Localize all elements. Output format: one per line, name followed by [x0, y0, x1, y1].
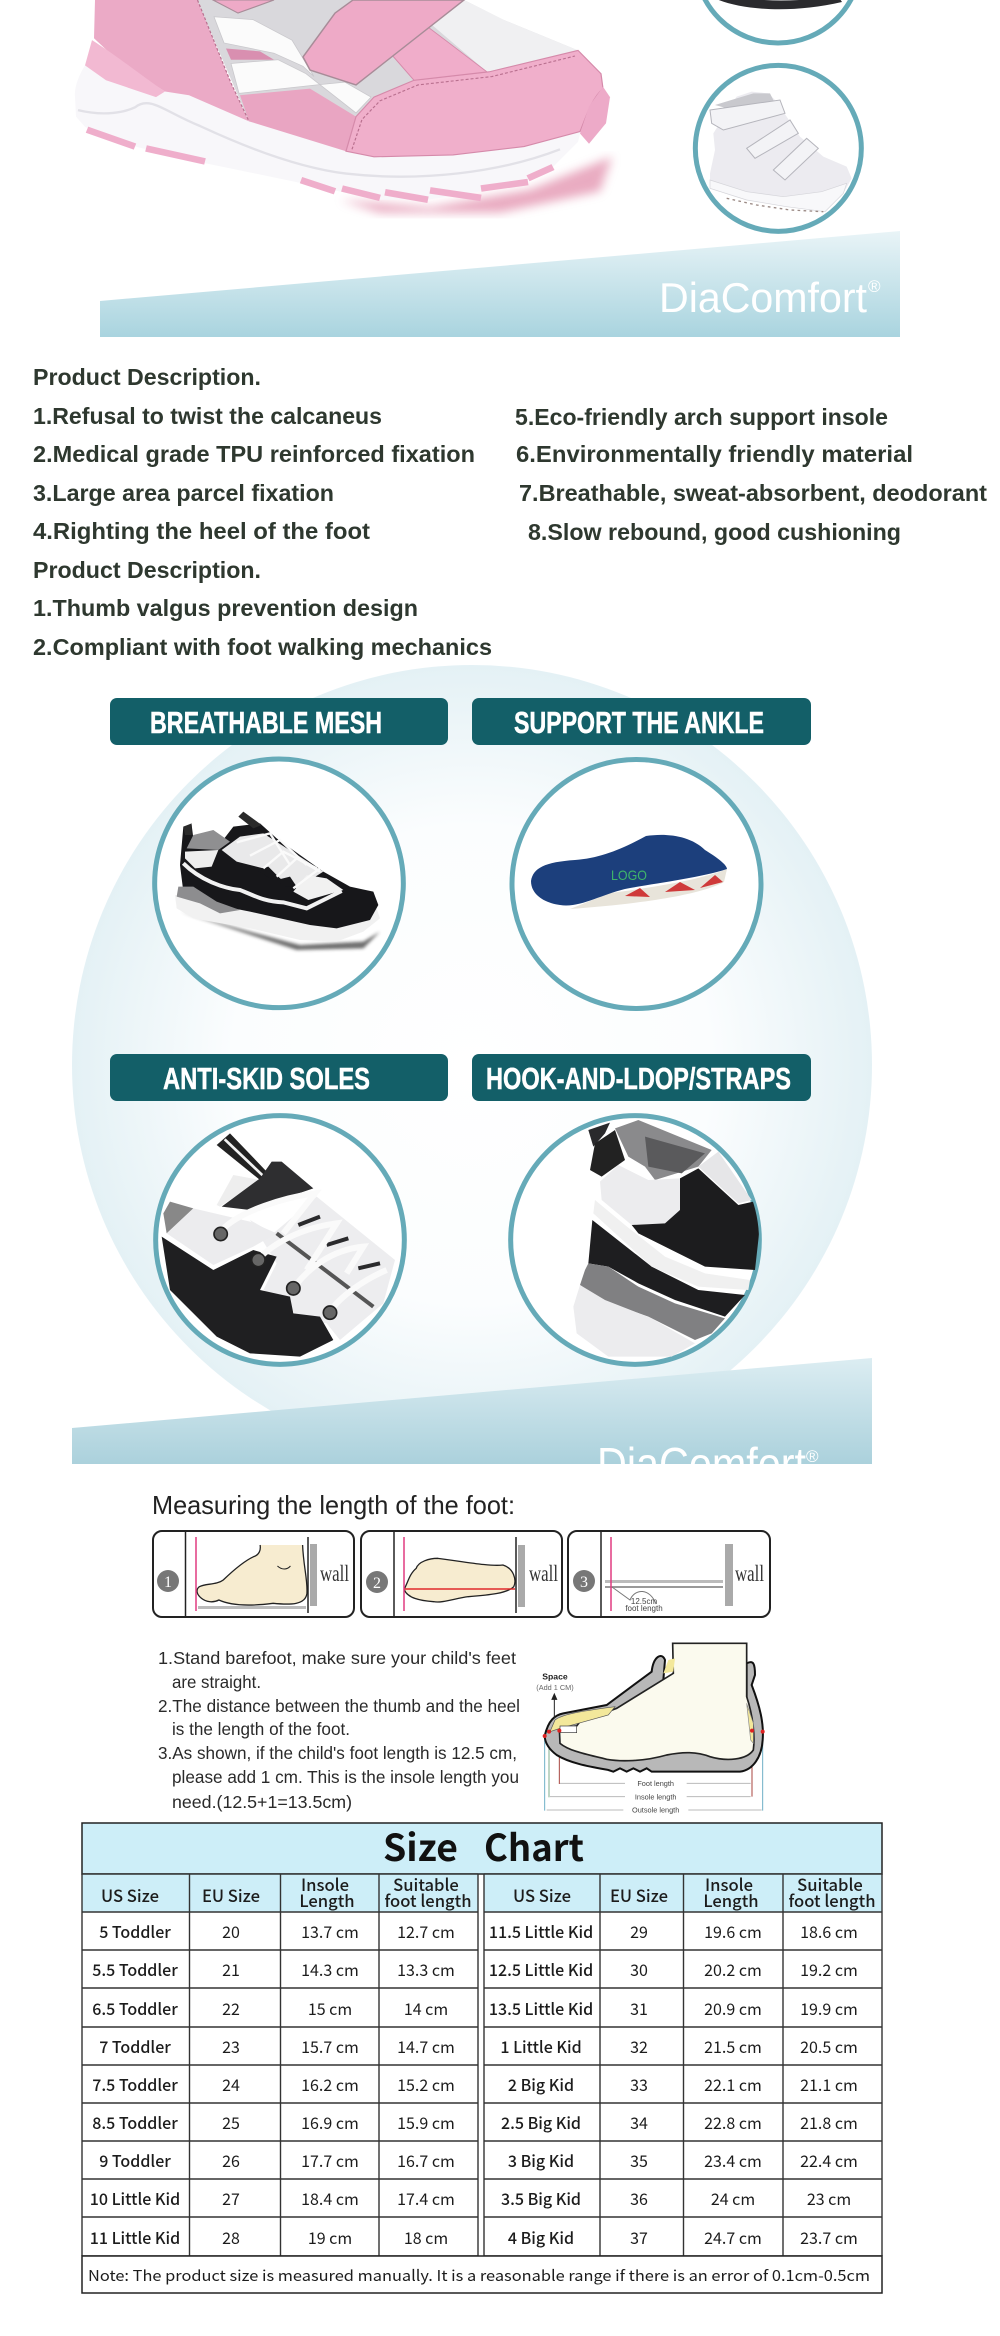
- step box 3: [568, 1531, 770, 1617]
- toe bumper: [580, 87, 610, 144]
- closeup photo: [573, 1120, 762, 1357]
- pink shoe product photo: [75, 0, 612, 213]
- straps: [710, 100, 818, 180]
- left rows: 14.7 cm: [397, 2034, 455, 2058]
- right rows: 21.8 cm: [800, 2110, 858, 2134]
- toe cap: [346, 50, 603, 157]
- right rows: 29: [630, 1919, 648, 1943]
- right rows: 18.6 cm: [800, 1919, 858, 1943]
- left rows: 14.3 cm: [301, 1957, 359, 1981]
- colored layer: [625, 875, 723, 897]
- insole underside: [570, 869, 727, 909]
- right header: foot length: [788, 1888, 876, 1912]
- product description text: 3.Large area parcel fixation: [33, 480, 334, 506]
- right size table: [484, 1872, 882, 2256]
- right rows: 20.5 cm: [800, 2034, 858, 2058]
- right rows: 21.1 cm: [800, 2072, 858, 2096]
- measuring instructions: 1.Stand barefoot, make sure your child's feet: [158, 1648, 516, 1668]
- outsole pink segments: [87, 130, 553, 200]
- product description text: 7.Breathable, sweat-absorbent, deodorant: [519, 480, 987, 506]
- heel cushion: [747, 1703, 753, 1743]
- circle: lace closeup: [156, 1116, 404, 1364]
- sole: [710, 180, 847, 212]
- left rows: 9 Toddler: [99, 2148, 171, 2172]
- midsole gray: [177, 887, 240, 913]
- right rows: 2.5 Big Kid: [501, 2110, 581, 2134]
- left rows: 18 cm: [404, 2225, 448, 2249]
- logo: LOGO: [611, 867, 647, 883]
- right rows: 11.5 Little Kid: [489, 1919, 593, 1943]
- left rows: 24: [222, 2072, 240, 2096]
- velcro strap lower: [303, 0, 464, 85]
- left rows: 15 cm: [308, 1996, 352, 2020]
- right rows: 37: [630, 2225, 648, 2249]
- step box 2: [361, 1531, 562, 1617]
- pull tab: [238, 812, 262, 828]
- brand name: DiaComfort: [659, 274, 867, 321]
- sneaker upper: [180, 823, 378, 928]
- shoe shell: [545, 1656, 763, 1772]
- step box 3: 12.5cm: [631, 1597, 657, 1606]
- brand band bottom: [72, 1358, 872, 1490]
- left rows: 19 cm: [308, 2225, 352, 2249]
- shoe shadow: [340, 157, 612, 213]
- space arrow: [552, 1694, 557, 1718]
- left rows: 15.2 cm: [397, 2072, 455, 2096]
- label: support the ankle: [472, 698, 811, 745]
- left rows: 16.7 cm: [397, 2148, 455, 2172]
- laces: [237, 833, 320, 888]
- left rows: 5.5 Toddler: [92, 1957, 178, 1981]
- left rows: 7.5 Toddler: [92, 2072, 178, 2096]
- measuring instructions: need.(12.5+1=13.5cm): [172, 1792, 352, 1812]
- toe mesh: [293, 875, 343, 900]
- right rows: 19.6 cm: [704, 1919, 762, 1943]
- small circle: white velcro shoe: [695, 65, 861, 231]
- toe cushion: [550, 1707, 615, 1732]
- label: hook and loop straps: HOOK-AND-LDOP/STRAPS: [486, 1061, 791, 1096]
- step box 1: wall: [320, 1561, 349, 1586]
- right header: EU Size: [610, 1883, 668, 1907]
- left rows: 18.4 cm: [301, 2186, 359, 2210]
- right mesh: [428, 0, 578, 72]
- product description text: 5.Eco-friendly arch support insole: [515, 404, 888, 430]
- mesh panel: [197, 0, 578, 121]
- ruler: [605, 1580, 723, 1583]
- left rows: 10 Little Kid: [90, 2186, 180, 2210]
- measuring instructions: is the length of the foot.: [172, 1719, 350, 1739]
- table note: [82, 2256, 882, 2293]
- product description text: Product Description.: [33, 364, 261, 390]
- left header: Length: [299, 1888, 355, 1912]
- left header: EU Size: [202, 1883, 260, 1907]
- product description text: 6.Environmentally friendly material: [516, 441, 913, 467]
- left rows: 17.7 cm: [301, 2148, 359, 2172]
- step box 1: [153, 1531, 354, 1617]
- right header: Suitable: [797, 1872, 863, 1896]
- left rows: 15.9 cm: [397, 2110, 455, 2134]
- left header: Insole: [301, 1872, 349, 1896]
- right rows: 33: [630, 2072, 648, 2096]
- foot: [559, 1643, 754, 1761]
- shoe sole: [75, 65, 582, 200]
- step box 1: 1: [164, 1574, 172, 1591]
- right rows: 12.5 Little Kid: [489, 1957, 593, 1981]
- left rows: 7 Toddler: [99, 2034, 171, 2058]
- left rows: 8.5 Toddler: [92, 2110, 178, 2134]
- measuring instructions: please add 1 cm. This is the insole length you: [172, 1767, 519, 1787]
- right rows: 23.7 cm: [800, 2225, 858, 2249]
- measuring heading: Measuring the length of the foot:: [152, 1490, 515, 1520]
- circle: heel closeup: [511, 1116, 762, 1364]
- right rows: 36: [630, 2186, 648, 2210]
- right header: Insole: [705, 1872, 753, 1896]
- left grid: [82, 1874, 478, 2256]
- right header: US Size: [513, 1883, 571, 1907]
- shoe upper back quarter: [94, 0, 249, 121]
- left rows: 14 cm: [404, 1996, 448, 2020]
- right rows: 32: [630, 2034, 648, 2058]
- left header: foot length: [384, 1888, 472, 1912]
- right rows: 1 Little Kid: [500, 2034, 582, 2058]
- left rows: 11 Little Kid: [90, 2225, 180, 2249]
- rear tab: [183, 823, 192, 835]
- circle: insole: [512, 760, 761, 1008]
- left rows: 13.7 cm: [301, 1919, 359, 1943]
- label: breathable mesh: [110, 698, 448, 745]
- add one cm label: (Add 1 CM): [536, 1683, 574, 1692]
- brand band top: [100, 231, 900, 337]
- dark panels: [257, 867, 297, 887]
- left rows: 23: [222, 2034, 240, 2058]
- product description text: [33, 364, 987, 660]
- pink between stripes: [226, 49, 274, 60]
- heel mesh: [185, 850, 218, 868]
- tread: [727, 198, 823, 212]
- left header: [82, 1872, 478, 1912]
- product description text: 2.Compliant with foot walking mechanics: [33, 634, 492, 660]
- right header: [484, 1872, 882, 1912]
- right rows: 19.9 cm: [800, 1996, 858, 2020]
- measure points: [545, 1731, 763, 1736]
- white shoe body: [710, 92, 852, 212]
- right rows: 23.4 cm: [704, 2148, 762, 2172]
- left rows: 28: [222, 2225, 240, 2249]
- size chart title bar: Chart: [484, 1818, 584, 1872]
- collar: [715, 93, 775, 110]
- foot in shoe diagram: [536, 1643, 763, 1815]
- space label: Space: [542, 1672, 568, 1682]
- closeup photo: [162, 1133, 395, 1357]
- left rows: 26: [222, 2148, 240, 2172]
- right rows: 3 Big Kid: [508, 2148, 574, 2172]
- label: anti-skid soles: ANTI-SKID SOLES: [163, 1061, 370, 1096]
- left rows: 12.7 cm: [397, 1919, 455, 1943]
- step box 2: 2: [373, 1575, 381, 1592]
- right rows: 4 Big Kid: [508, 2225, 574, 2249]
- right rows: 30: [630, 1957, 648, 1981]
- size chart title bar: Size: [383, 1818, 458, 1872]
- right rows: 24 cm: [711, 2186, 755, 2210]
- left rows: 15.7 cm: [301, 2034, 359, 2058]
- right rows: 20.9 cm: [704, 1996, 762, 2020]
- left rows: 22: [222, 1996, 240, 2020]
- right rows: 22.1 cm: [704, 2072, 762, 2096]
- left rows: [90, 1919, 455, 2249]
- right header: Length: [703, 1888, 759, 1912]
- dimension lines: [559, 1730, 752, 1797]
- left rows: 5 Toddler: [99, 1919, 171, 1943]
- right rows: [489, 1919, 858, 2249]
- dark sole: [714, 0, 842, 9]
- right rows: 35: [630, 2148, 648, 2172]
- right rows: 23 cm: [807, 2186, 851, 2210]
- right rows: 21.5 cm: [704, 2034, 762, 2058]
- left header: Suitable: [393, 1872, 459, 1896]
- features panel background: [72, 665, 872, 1465]
- small circle: white shoe with dark sole: [695, 0, 861, 43]
- midsole contour: [78, 103, 560, 177]
- left size table: [82, 1872, 478, 2256]
- insole length label: Insole length: [635, 1792, 676, 1801]
- measuring instructions: 3.As shown, if the child's foot length is 12.5 cm,: [158, 1743, 517, 1763]
- step box 2: wall: [529, 1561, 558, 1586]
- product description text: 1.Thumb valgus prevention design: [33, 595, 418, 621]
- left rows: 17.4 cm: [397, 2186, 455, 2210]
- white stripe: [183, 863, 342, 908]
- right rows: 22.4 cm: [800, 2148, 858, 2172]
- right grid: [484, 1874, 882, 2256]
- product description text: 4.Righting the heel of the foot: [33, 518, 370, 544]
- toe gap: [560, 1726, 577, 1733]
- right rows: 31: [630, 1996, 648, 2020]
- step box 3: 3: [580, 1574, 588, 1591]
- right rows: 2 Big Kid: [508, 2072, 574, 2096]
- insole top: [531, 835, 727, 905]
- collar: [187, 830, 230, 850]
- lower pink panel: [240, 89, 356, 151]
- right rows: 13.5 Little Kid: [489, 1996, 593, 2020]
- size chart title bar: [82, 1818, 882, 1874]
- ankle cushion: [663, 1658, 675, 1673]
- velcro strap upper: [213, 0, 274, 13]
- stitching: [198, 0, 575, 149]
- label: anti-skid soles: [110, 1054, 448, 1101]
- label: hook and loop straps: [472, 1054, 811, 1101]
- outsole length label: Outsole length: [632, 1806, 679, 1815]
- left rows: 16.2 cm: [301, 2072, 359, 2096]
- right rows: 20.2 cm: [704, 1957, 762, 1981]
- sneaker shadow: [180, 912, 380, 950]
- left rows: 6.5 Toddler: [92, 1996, 178, 2020]
- right rows: 34: [630, 2110, 648, 2134]
- foot side view: [197, 1545, 307, 1605]
- measuring instructions: 2.The distance between the thumb and the heel: [158, 1696, 520, 1716]
- label: support the ankle: SUPPORT THE ANKLE: [514, 705, 764, 740]
- label: breathable mesh: BREATHABLE MESH: [150, 705, 382, 740]
- right rows: 24.7 cm: [704, 2225, 762, 2249]
- right rows: 3.5 Big Kid: [501, 2186, 581, 2210]
- left rows: 27: [222, 2186, 240, 2210]
- registered mark: ®: [868, 277, 881, 296]
- product description text: 2.Medical grade TPU reinforced fixation: [33, 441, 475, 467]
- step box 3: wall: [735, 1561, 764, 1586]
- heel cap: [85, 40, 165, 97]
- measuring instructions: are straight.: [172, 1672, 261, 1692]
- right rows: 19.2 cm: [800, 1957, 858, 1981]
- product description text: 8.Slow rebound, good cushioning: [528, 519, 901, 545]
- circle: black sneaker: [155, 759, 403, 1008]
- product description text: Product Description.: [33, 557, 261, 583]
- left rows: 16.9 cm: [301, 2110, 359, 2134]
- measuring instructions: [158, 1648, 520, 1812]
- white side stripes: [214, 17, 371, 113]
- step box 3: foot length: [625, 1604, 663, 1613]
- foot top view: [404, 1558, 515, 1602]
- table note: Note: The product size is measured manually. It is a reasonable range if there is an error of 0.1cm-0.5cm: [88, 2265, 870, 2286]
- product description text: 1.Refusal to twist the calcaneus: [33, 403, 382, 429]
- left rows: 13.3 cm: [397, 1957, 455, 1981]
- foot length label: Foot length: [637, 1779, 674, 1788]
- left header: US Size: [101, 1883, 159, 1907]
- left rows: 25: [222, 2110, 240, 2134]
- mid pink panel: [392, 27, 487, 80]
- left rows: 21: [222, 1957, 240, 1981]
- right rows: 22.8 cm: [704, 2110, 762, 2134]
- tongue and eyestay mesh: [222, 833, 323, 888]
- left rows: 20: [222, 1919, 240, 1943]
- cropped brand name: ®: [806, 1447, 819, 1466]
- sneaker sole: [175, 895, 380, 942]
